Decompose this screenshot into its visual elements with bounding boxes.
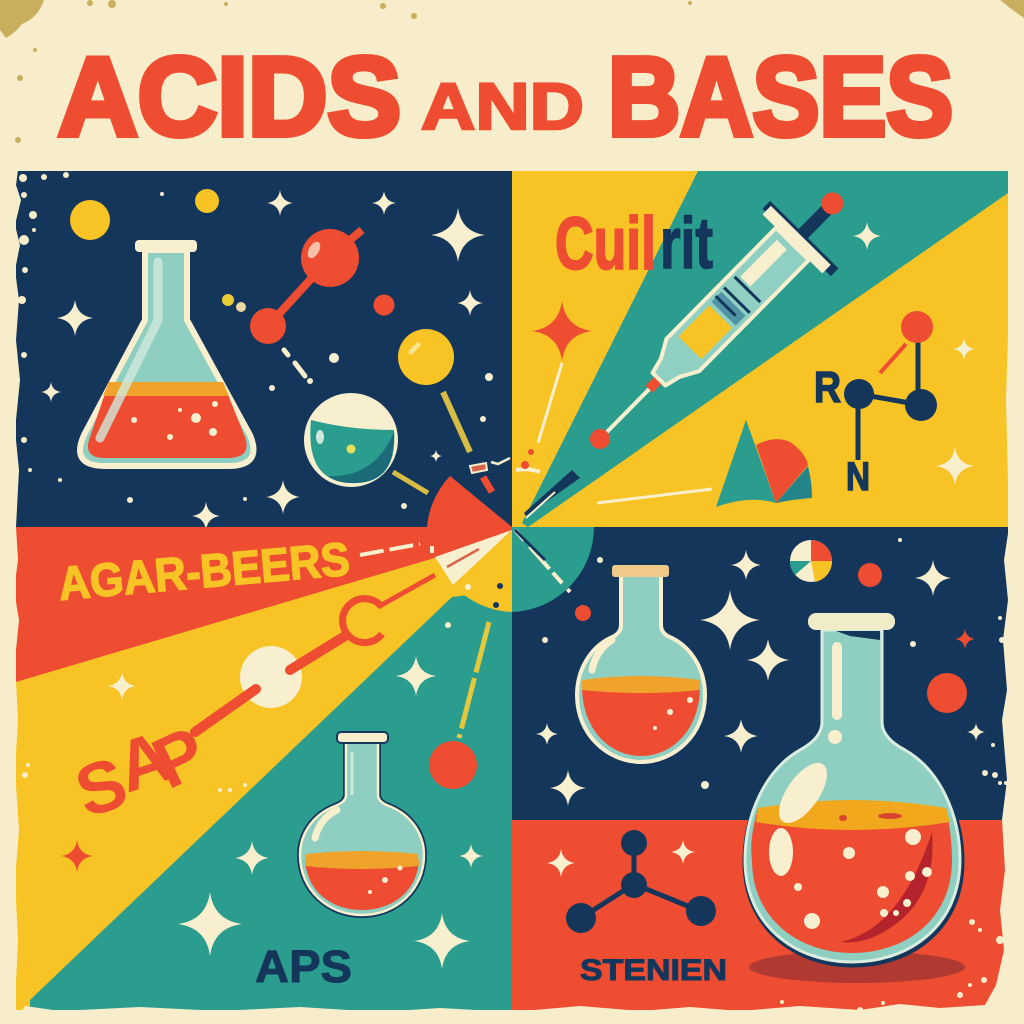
- star red: [61, 840, 93, 872]
- panel: bottom left rays: [16, 527, 512, 1010]
- molecule: [566, 830, 716, 933]
- stick and red ball: [429, 622, 489, 789]
- stars: [108, 622, 483, 969]
- yellow dots: [70, 189, 219, 240]
- label and molecule: R N: [814, 311, 937, 499]
- panel: bottom right red: [512, 820, 1008, 1010]
- icon: sphere flask: [304, 393, 428, 493]
- icon: red sparkle: [532, 301, 592, 443]
- title: ACIDS: [58, 35, 401, 159]
- title: BASES: [608, 35, 953, 159]
- title: [58, 35, 953, 159]
- stars: [41, 190, 493, 530]
- icon: yellow sphere with stick: [398, 329, 470, 452]
- panel: top left navy: [16, 171, 512, 530]
- title: AND: [421, 69, 584, 143]
- pie icon: [790, 540, 832, 582]
- label: APS: APS: [255, 941, 352, 992]
- icon: pyramid and pie: [597, 420, 812, 507]
- label and molecule: R N: R: [814, 363, 841, 412]
- label and molecule: R N: N: [846, 455, 870, 499]
- red dots: [858, 563, 967, 713]
- molecule chain: [195, 544, 435, 732]
- star cream right: [953, 338, 975, 360]
- star cream: [853, 222, 881, 250]
- centre burst: [427, 449, 594, 621]
- icon: round flask: [577, 565, 705, 762]
- star red: [955, 629, 975, 649]
- label: SAP: SAP: [66, 712, 218, 833]
- icon: conical flask: [80, 240, 254, 466]
- icon: large round flask: [745, 613, 961, 964]
- stars: [547, 840, 695, 877]
- stars: [536, 538, 1002, 806]
- label: Cuilrit: rit: [660, 204, 713, 284]
- shadow: [749, 951, 965, 983]
- icon: round flask: [300, 732, 424, 915]
- label: Cuilrit: Cuil: [555, 202, 656, 285]
- icon: syringe: [560, 163, 876, 481]
- panel: bottom right navy: [512, 527, 1008, 820]
- label: STENIEN: STENIEN: [580, 954, 727, 987]
- panel: top right yellow and teal rays: [512, 163, 1008, 527]
- star cream lower right: [936, 447, 974, 485]
- molecule: red dumbbell: [222, 229, 394, 384]
- label: AGAR-BEERS: AGAR-BEERS: [56, 532, 352, 610]
